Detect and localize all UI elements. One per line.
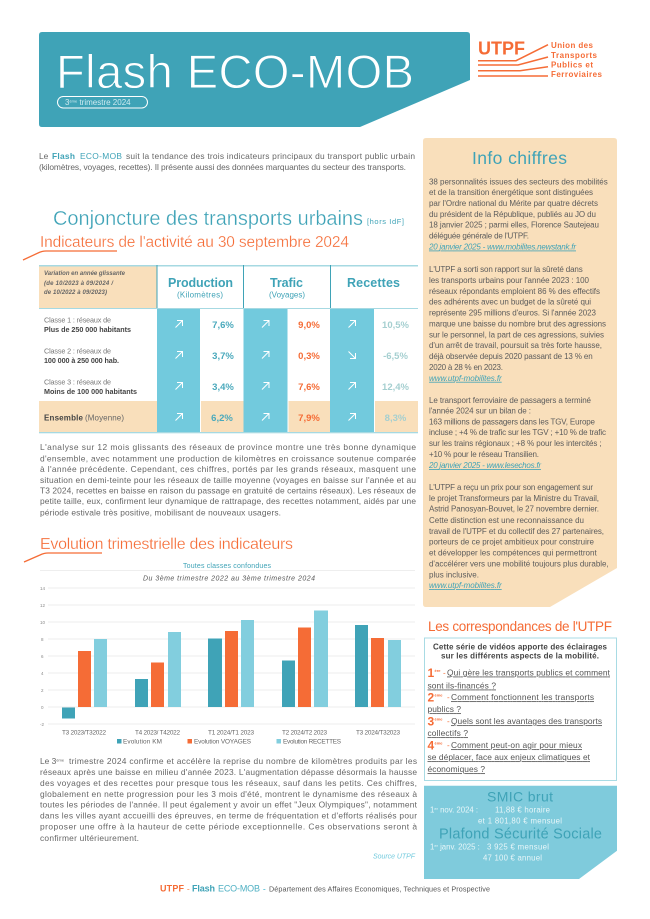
item: prix Transformeurs [429,483,609,590]
row labels: (Moyenne) [85,414,124,422]
y axis: 8 [41,637,44,642]
item: transport ferroviaire: Le transport ferroviaire de passagers a terminé [429,396,592,405]
footer: Flash [192,884,215,894]
y axis: 6 [41,654,44,659]
commentary paragraph: trimestre 2024 confirme et accélère la reprise du nombre de kilomètres produits par les [69,756,417,766]
title: Flash ECO-MOB [56,45,414,98]
item: rapport sûreté: représente 295 millions d'euros. Si l'année 2023 [429,308,597,318]
SMIC values [430,806,562,826]
table values: 8,3% [385,413,407,424]
x axis labels: T4 2023/ T42022 [135,730,180,736]
intro text: (kilomètres, voyages, recettes). Il présente aussi des données marquantes du secteur des transports. [39,162,406,172]
video 4 [428,738,591,774]
item: prix Transformeurs: plus inclusive. [429,570,479,580]
item: Ordre national du Mérite: par l'Ordre national du Mérite par quatre décrets [429,199,598,208]
y axis: 4 [41,671,44,676]
intro text: Flash [52,151,75,161]
item: Ordre national du Mérite: 18 janvier 2025 ; parmi elles, Florence Sautejeau [429,220,599,230]
logo: UTPF: Publics et [551,60,593,70]
trend arrows [176,320,356,420]
item: rapport sûreté: réseaux répondants emploient 86 % des effectifs [429,287,600,296]
commentary paragraph: ème [56,758,65,763]
heading: Les correspondances: Les correspondances de l'UTPF [428,619,612,634]
footer: UTPF [160,884,184,894]
logo: UTPF: Ferroviaires [551,70,603,79]
commentary paragraph: confirmer ultérieurement. [40,833,139,843]
item: Ordre national du Mérite: du président de la République, publiés au JO du [429,210,596,219]
period badge [58,96,148,108]
item: transport ferroviaire: 20 janvier 2025 - www.lesechos.fr [428,461,541,470]
item: rapport sûreté: www.utpf-mobilites.fr [429,374,502,383]
column headings: (Kilomètres) [177,290,223,300]
video 2: 2 [428,690,434,704]
item: Ordre national du Mérite: déléguée générale de l'UTPF. [429,232,529,240]
video 2: ème [434,692,443,698]
table values: 3,4% [212,382,234,393]
item: prix Transformeurs: le projet Transformeurs par la Ministre du Travail, [429,494,599,503]
table note: de 10/2022 à 09/2023) [44,290,107,296]
table values: 0,3% [298,351,320,362]
video 3: collectifs ? [428,728,468,738]
heading: Indicateurs: Indicateurs de l'activité au 30 septembre 2024 [40,234,349,251]
series: Evolution VOYAGES [78,628,384,707]
y axis [40,586,46,727]
item: prix Transformeurs: www.utpf-mobilites.fr [429,581,502,590]
item: transport ferroviaire [428,396,606,470]
table values: 7,6% [212,320,234,331]
logo: UTPF: UTPF [478,39,525,59]
table values: 6,2% [211,413,233,424]
video 4: économiques ? [428,764,485,774]
table values: -6,5% [383,351,408,362]
analysis paragraph [40,442,416,518]
indicators table [39,265,418,433]
row labels: Classe 1 : réseaux de [44,316,111,324]
video 2: Comment fonctionnent les transports [451,692,594,702]
item: Ordre national du Mérite: 38 personnalités issues des secteurs des mobilités [429,178,608,186]
column headings: (Voyages) [269,290,305,300]
table values: 7,6% [298,382,320,393]
y axis: 2 [41,688,44,693]
Plafond values: 1 [430,843,434,852]
Plafond values: 47 100 € annuel [483,854,542,863]
video 4: se déplacer, face aux enjeux climatiques et [428,752,591,762]
heading: Evolution [24,536,293,562]
analysis paragraph: période estivale très positive, mobilisant de nouveaux usagers. [40,508,281,518]
period badge: 3 [65,98,69,107]
video 1: Qui gère les transports publics et comment [447,668,611,678]
intro text: ECO-MOB [80,151,122,161]
chart: quarterly evolution [40,563,415,746]
item: rapport sûreté: marque une baisse du nombre brut des agressions [429,320,606,328]
item: prix Transformeurs: Cette distinction est une reconnaissance du [429,516,584,525]
column headings: Recettes [347,276,400,290]
video 4: Comment peut-on agir pour mieux [451,740,583,750]
video 1 [428,666,611,690]
analysis paragraph: L'analyse sur 12 mois glissants des réseaux de province montre une très bonne dynamique [40,442,416,452]
video 2: - [447,693,450,702]
analysis paragraph: situation en demi-teinte pour les réseaux de taille moyenne (voyages en baisse sur l'année et au [40,475,416,485]
item: rapport sûreté: 2020 à 28 % en 2023. [429,363,503,372]
panel intro: sur les différents aspects de la mobilité. [441,652,599,660]
SMIC values: 11,88 € horaire [495,806,550,815]
y axis: -2 [40,722,44,727]
item: transport ferroviaire: incluse ; +4 % de trafic sur les TGV ; +10 % de trafic [429,428,606,437]
row labels: Moins de 100 000 habitants [44,387,137,396]
Plafond values: er [434,843,439,848]
footer: Département des Affaires Economiques, Techniques et Prospective [269,884,490,894]
x axis labels [62,730,400,736]
column headings: Trafic [270,276,303,290]
commentary paragraph: globalement en nette progression pour les 3 mois d'été, montrent le dynamisme des réseaux à [40,789,417,799]
intro text [39,151,415,172]
table values: 3,7% [212,351,234,362]
video 3: - [447,717,450,726]
logo: UTPF: Transports [551,51,598,60]
commentary paragraph: des voyages et des recettes pour presque tous les réseaux, sauf dans les petits. Ces chiffres, [40,778,417,788]
commentary paragraph: dans les villes ayant accueilli des épreuves, en terme de fréquentation et d'efforts réalisés pour [40,810,417,820]
chart legend: Evolution RECETTES [283,738,341,746]
panel: Info chiffres [423,138,617,607]
commentary paragraph: Le 3 [40,756,56,766]
video 2 [428,690,594,714]
item: transport ferroviaire: l'année 2024 sur un bilan de : [429,406,531,416]
video 3: ème [434,716,443,722]
chart legend [117,738,341,746]
commentary paragraph: réseaux après une baisse en milieu d'année 2023. L'augmentation dépasse désormais la hausse [40,767,417,777]
footer [160,884,490,894]
logo: UTPF [478,39,603,79]
item: transport ferroviaire: sur les trains régionaux ; +8 % pour les intercités ; [429,439,602,448]
row labels: Plus de 250 000 habitants [44,325,131,334]
series: Evolution KM [62,625,368,718]
section heading: Conjoncture: Conjoncture des transports urbains [53,208,363,230]
panel intro: Cette série de vidéos apporte des éclairages [433,642,608,652]
item: rapport sûreté [429,265,606,383]
item: prix Transformeurs: Astrid Panosyan-Bouvet, le 27 novembre dernier. [429,504,599,514]
heading: Evolution: Evolution trimestrielle des indicateurs [40,536,293,553]
analysis paragraph: à l'année précédente. Cependant, ces chiffres, portés par les grands réseaux, masquent une [40,464,416,474]
commentary paragraph [40,756,418,843]
table note: (de 10/2023 à 09/2024 / [44,281,114,287]
SMIC values: er [434,806,439,811]
table values: 7,9% [298,413,320,424]
Plafond values: 3 925 € mensuel [487,843,549,852]
item: Ordre national du Mérite [428,178,608,252]
item: transport ferroviaire: +10 % pour le réseau Transilien. [429,450,539,459]
commentary paragraph: toutes les périodes de l'année. Il peut également y avoir un effet "Jeux Olympiques", notamment [40,800,418,810]
y axis: 10 [40,620,46,625]
row labels: Classe 3 : réseaux de [44,378,111,386]
Plafond values: janv. 2025 : [438,843,480,852]
heading: Indicateurs [23,234,349,260]
x axis labels: T2 2024/T2 2023 [282,730,327,736]
column headings [168,276,400,300]
analysis paragraph: T3 2024, recettes en baisse en raison du passage en gratuité de certains réseaux). Les réseaux de [40,486,416,496]
item: prix Transformeurs: L'UTPF a reçu un prix pour son engagement sur [429,483,593,492]
item: rapport sûreté: d'un arrêt de travail, poursuit sa très forte hausse, [429,341,602,350]
logo: UTPF: Union des [551,41,594,50]
row labels [44,316,137,422]
item: prix Transformeurs: d'accélérer vers une mobilité toujours plus durable, [429,560,609,568]
SMIC values: et 1 801,80 € mensuel [478,817,562,826]
panel intro [433,642,608,660]
y axis: 0 [41,705,44,710]
x axis labels: T3 2024/T32023 [356,730,400,736]
item: rapport sûreté: sur le personnel, la part de ces agressions, suivies [429,330,604,340]
period badge: ème [69,98,78,104]
table values: 10,5% [382,320,410,331]
item: rapport sûreté: des adhérents avec un budget de la sûreté qui [429,298,591,306]
item: Ordre national du Mérite: et de la transition énergétique sont distinguées [429,188,593,197]
SMIC heading: SMIC brut [487,788,553,804]
row labels: Ensemble [44,414,84,422]
video 3: Quels sont les avantages des transports [451,716,602,726]
table note [44,271,126,296]
video 1: ère [434,668,441,673]
item: transport ferroviaire: 163 millions de passagers dans les TGV, Europe [429,418,596,426]
SMIC values: 1 [430,806,434,815]
x axis labels: T3 2023/T32022 [62,730,106,736]
y axis: 14 [40,586,46,591]
y axis: 12 [40,603,46,608]
row labels: 100 000 à 250 000 hab. [44,356,119,365]
chart legend: Evolution KM [123,738,162,746]
intro text: Le [39,151,49,161]
video 4: - [447,741,450,750]
source note: Source UTPF [373,854,416,860]
footer: ECO-MOB [218,884,260,894]
video 3 [428,714,602,738]
video 3: 3 [428,714,434,728]
table values [211,320,410,424]
table values: 12,4% [382,382,410,393]
Plafond values [430,843,549,863]
analysis paragraph: petite taille, eux, confirment leur dynamique de rattrapage, des recettes notamment, aidés par une [40,496,416,506]
footer: - [263,884,266,894]
item: prix Transformeurs: et développer les compétences qui permettront [429,548,597,558]
panel heading: Info chiffres [472,148,567,168]
section heading: Conjoncture: [hors IdF] [367,217,404,226]
Plafond heading: Plafond Sécurité Sociale [439,826,602,842]
SMIC values: nov. 2024 : [438,806,478,815]
x axis labels: T1 2024/T1 2023 [208,730,254,736]
video 1: 1 [428,666,434,680]
item: rapport sûreté: L'UTPF a sorti son rapport sur la sûreté dans [429,265,583,274]
item: Ordre national du Mérite: 20 janvier 2025 - www.mobilites.newstank.fr [428,242,576,252]
panel: SMIC and Plafond [424,786,617,879]
period badge: trimestre 2024 [77,98,131,107]
analysis paragraph: d'ensemble, avec notamment une production de kilomètres en croissance soutenue comparée [40,454,416,464]
table note: Variation en année glissante [44,271,126,277]
header banner [39,32,470,127]
table values: 9,0% [298,320,320,331]
item: rapport sûreté: déjà observée depuis 2020 passant de 13 % en [429,352,593,361]
panel: videos [424,638,616,780]
row labels: Classe 2 : réseaux de [44,346,111,356]
chart legend: Evolution VOYAGES [194,738,251,746]
item: prix Transformeurs: porteurs de ce projet ambitieux pour construire [429,538,595,546]
chart subtitle: Toutes classes confondues [183,563,272,570]
video 4: 4 [428,738,434,752]
video 1: sont ils-financés ? [428,680,496,690]
intro text: suit la tendance des trois indicateurs principaux du transport public urbain [126,151,415,161]
item: rapport sûreté: les transports urbains pour l'année 2023 : 100 [429,276,590,285]
video 1: - [443,668,446,678]
commentary paragraph: proposer une offre à la hauteur de cette période exceptionnelle. Ces observations seront à [40,822,417,832]
footer: - [187,884,190,894]
item: prix Transformeurs: travail de l'UTPF et du collectif des 27 partenaires, [429,527,604,536]
chart title: Du 3ème trimestre 2022 au 3ème trimestre 2024 [143,576,315,582]
video 2: publics ? [428,704,461,714]
series: Evolution RECETTES [94,610,401,707]
column headings: Production [168,276,233,290]
video 4: ème [434,740,443,746]
